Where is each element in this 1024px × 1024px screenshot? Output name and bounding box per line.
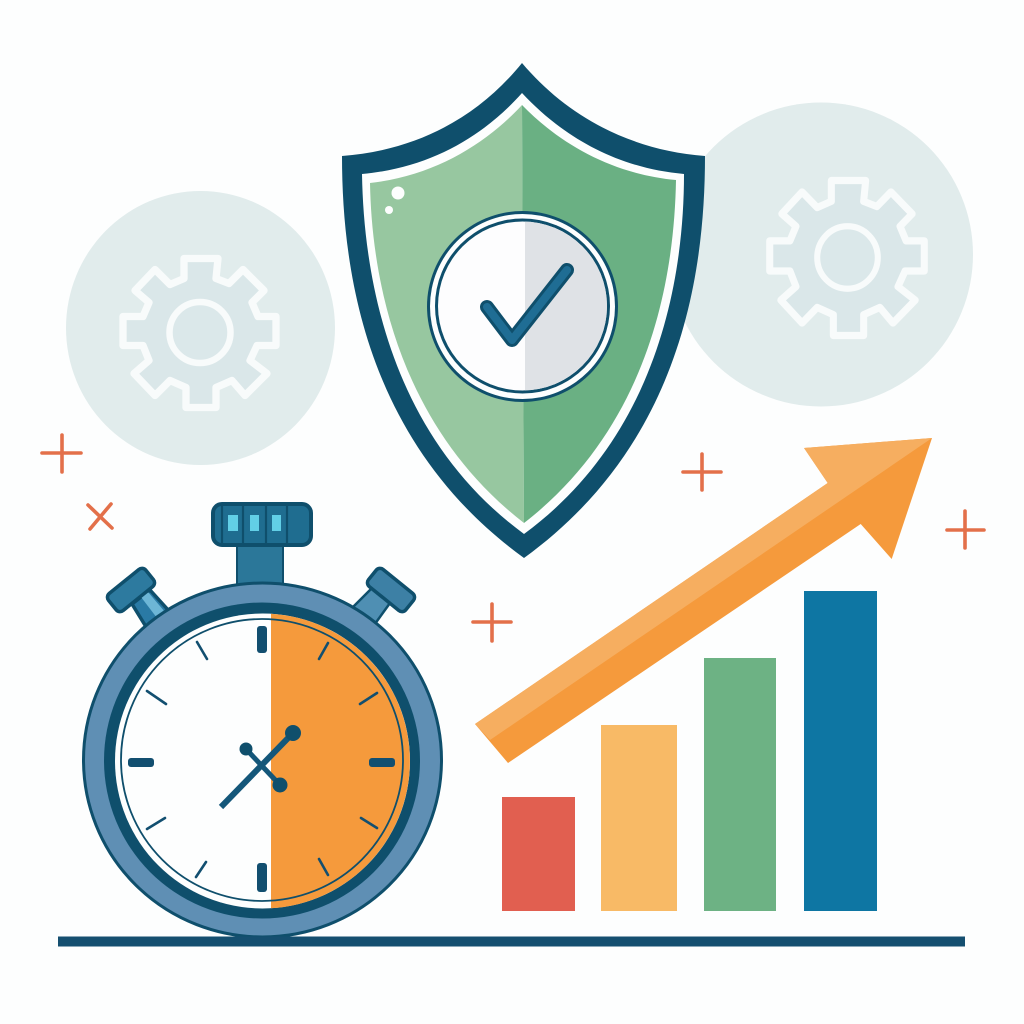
orange sector	[271, 614, 410, 908]
shield	[342, 63, 705, 558]
bar chart	[502, 591, 877, 911]
check badge	[427, 211, 620, 402]
stopwatch	[84, 504, 442, 937]
tick marks	[128, 626, 395, 892]
clock hands	[221, 725, 301, 807]
shield highlight dots	[385, 186, 404, 214]
right gear circle	[669, 102, 973, 406]
illustration	[40, 63, 986, 946]
ground line	[58, 936, 965, 946]
crown	[213, 504, 311, 587]
sparkles	[42, 435, 984, 641]
left gear circle	[66, 191, 335, 465]
growth arrow	[475, 438, 932, 763]
side buttons	[105, 566, 417, 630]
case	[84, 583, 442, 937]
